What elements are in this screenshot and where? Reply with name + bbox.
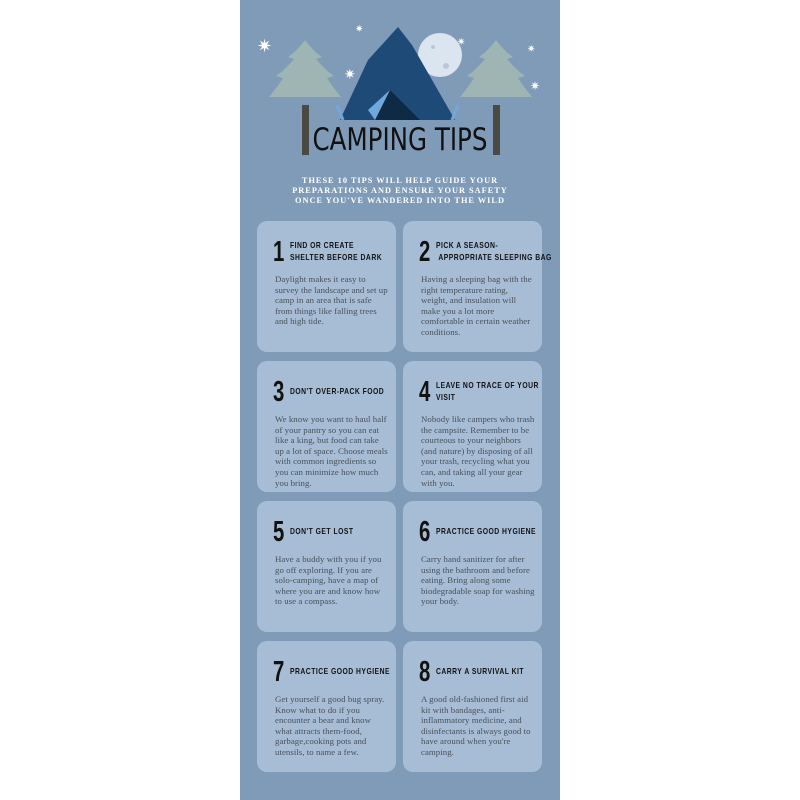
card 3: We know you want to haul half of your pantry so you can eat like a king, but food can take up a lot of space. Choose meals with common ingredients so you can minimize how much you bring. xyxy=(275,414,388,488)
card 4: Nobody like campers who trash the campsite. Remember to be courteous to your neighbors (and nature) by disposing of all your trash, recycling what you can, and taking all your gear with you. xyxy=(421,414,534,488)
icon: stars: ✷ xyxy=(457,37,465,48)
card 1: Daylight makes it easy to survey the landscape and set up camp in an area that is safe from things like falling trees and high tide. xyxy=(275,274,388,326)
card 8 xyxy=(403,641,542,772)
subtitle: ONCE YOU'VE WANDERED INTO THE WILD xyxy=(295,196,505,205)
card 5 xyxy=(257,501,396,632)
card 4: VISIT xyxy=(436,392,455,402)
card 6: PRACTICE GOOD HYGIENE xyxy=(436,526,536,536)
card 2 xyxy=(403,221,542,352)
card 8: 8 xyxy=(419,656,430,688)
icon: stars xyxy=(257,24,540,93)
card 2: 2 xyxy=(419,236,430,268)
card 4 xyxy=(403,361,542,492)
card 5: 5 xyxy=(273,516,284,548)
icon: tent xyxy=(337,27,458,120)
card 3 xyxy=(257,361,396,492)
card 6: 6 xyxy=(419,516,430,548)
card 4: 4 xyxy=(419,376,430,408)
card 5: Have a buddy with you if you go off exploring. If you are solo-camping, have a map of where you are and know how to use a compass. xyxy=(275,554,381,606)
card 7: PRACTICE GOOD HYGIENE xyxy=(290,666,390,676)
card 6 xyxy=(403,501,542,632)
card 2: Having a sleeping bag with the right temperature rating, weight, and insulation will make you a lot more comfortable in certain weather conditions. xyxy=(421,274,532,337)
card 6: Carry hand sanitizer for after using the bathroom and before eating. Bring along some biodegradable soap for washing your body. xyxy=(421,554,535,606)
icon: stars: ✷ xyxy=(344,66,356,82)
card 3: 3 xyxy=(273,376,284,408)
card 5: DON'T GET LOST xyxy=(290,526,354,536)
icon: left tree xyxy=(269,40,341,155)
icon: stars: ✷ xyxy=(527,44,535,55)
title: CAMPING TIPS xyxy=(313,122,487,158)
icon: stars: ✷ xyxy=(355,24,363,35)
card 2: PICK A SEASON- xyxy=(436,240,498,250)
card 8: A good old-fashioned first aid kit with bandages, anti-inflammatory medicine, and disinfectants is always good to have around when you're camping. xyxy=(421,694,531,757)
card 8: CARRY A SURVIVAL KIT xyxy=(436,666,524,676)
card 7: Get yourself a good bug spray. Know what to do if you encounter a bear and know what attracts them-food, garbage,cooking pots and utensils, to name a few. xyxy=(275,694,384,757)
card 1: 1 xyxy=(273,236,284,268)
icon: moon xyxy=(418,33,462,77)
background column xyxy=(240,0,560,800)
card 7: 7 xyxy=(273,656,284,688)
subtitle xyxy=(292,176,508,205)
icon: stars: ✷ xyxy=(530,79,540,93)
card 1: SHELTER BEFORE DARK xyxy=(290,252,382,262)
icon: stars: ✷ xyxy=(257,36,272,56)
card 3: DON'T OVER-PACK FOOD xyxy=(290,386,384,396)
card 1: FIND OR CREATE xyxy=(290,240,354,250)
subtitle: PREPARATIONS AND ENSURE YOUR SAFETY xyxy=(292,186,508,195)
header illustration xyxy=(257,24,540,155)
card 4: LEAVE NO TRACE OF YOUR xyxy=(436,380,539,390)
subtitle: THESE 10 TIPS WILL HELP GUIDE YOUR xyxy=(302,176,498,185)
card 7 xyxy=(257,641,396,772)
card 1 xyxy=(257,221,396,352)
card 2: APPROPRIATE SLEEPING BAG xyxy=(438,252,552,262)
icon: right tree xyxy=(460,40,532,155)
